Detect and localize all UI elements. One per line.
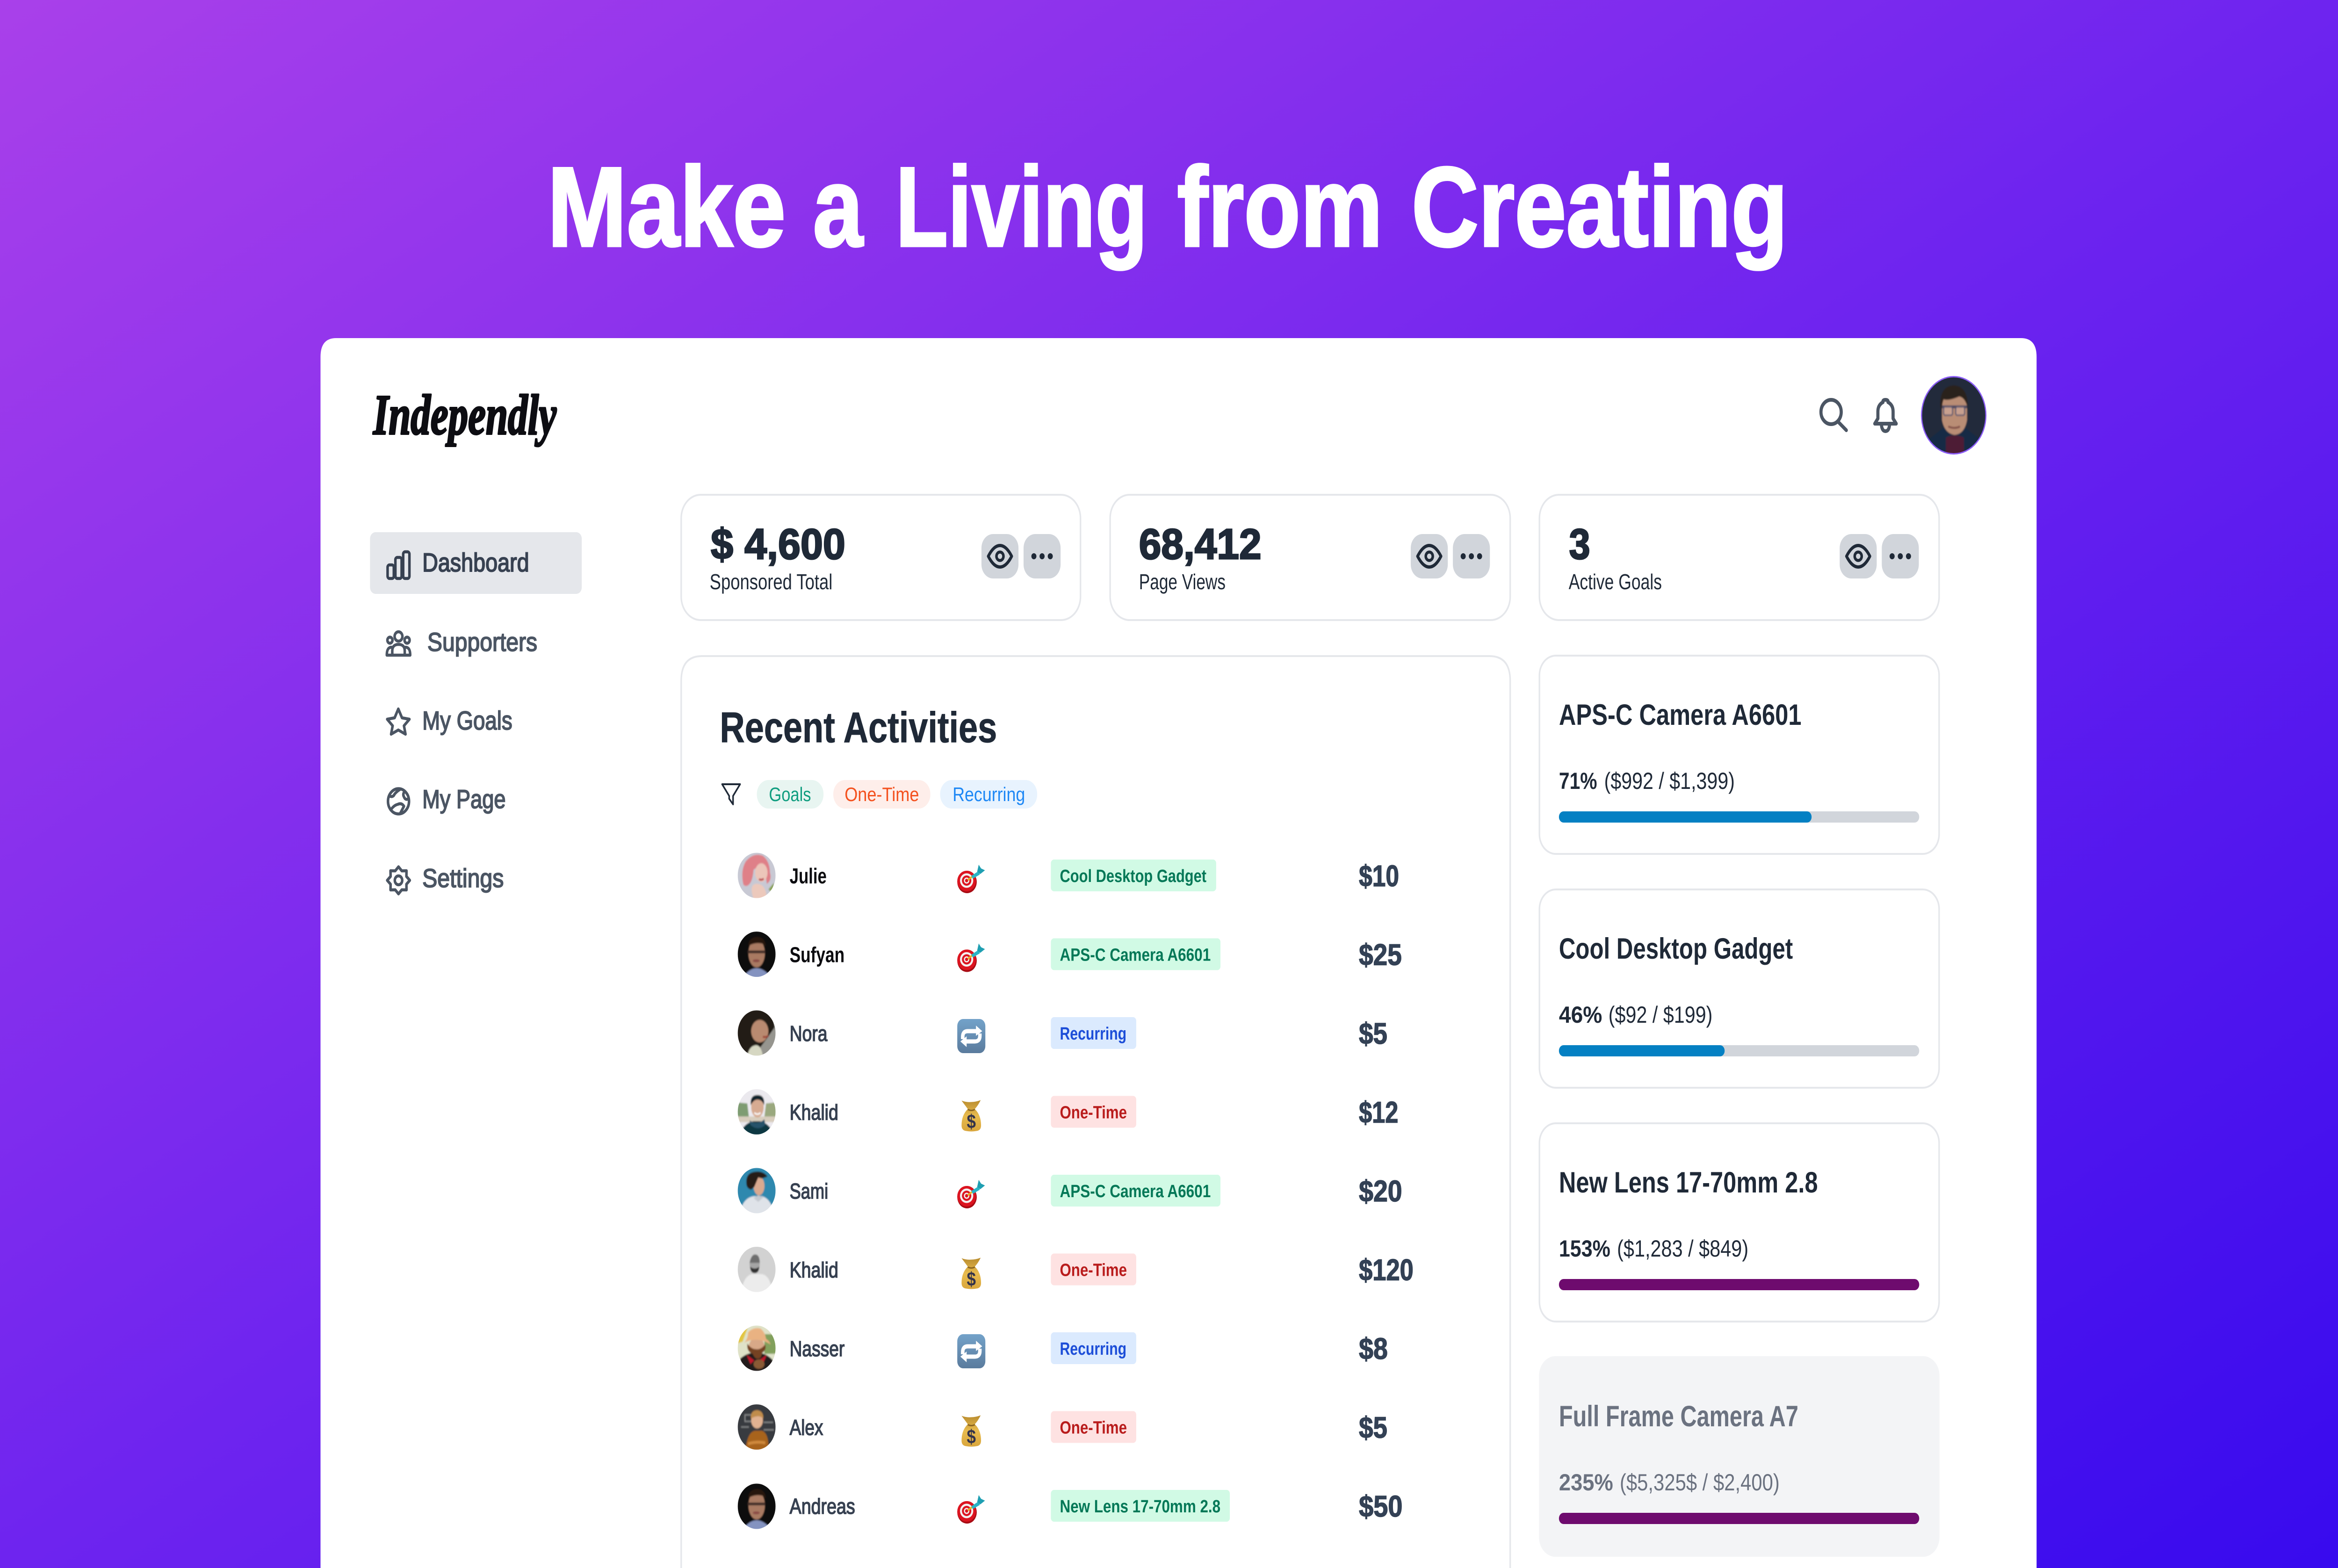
nav item: My Goals: My Goals [422,706,512,735]
logo: Independly [373,383,557,447]
filter pill: One-Time [833,780,931,809]
row: Sami [737,1167,1402,1214]
goal card: APS-C Camera A6601: 71% [1559,767,1597,794]
filter pill: Goals: Goals [769,784,811,806]
filter pill: One-Time: One-Time [844,784,919,806]
row: Nasser: Recurring [1060,1339,1126,1359]
row: Alex [737,1404,1387,1451]
title: Make [548,144,786,270]
goal card: Full Frame Camera A7: ($5,325$ / $2,400) [1620,1469,1780,1496]
goal card: Cool Desktop Gadget [1539,889,1939,1088]
row: Sufyan: Sufyan [790,943,844,967]
nav item: Supporters: Supporters [427,627,537,657]
goal card: New Lens 17-70mm 2.8: ($1,283 / $849) [1617,1235,1748,1262]
row: Khalid: One-Time [1060,1260,1127,1280]
goal card: Full Frame Camera A7: Full Frame Camera A7 [1559,1400,1798,1433]
row: Khalid [737,1089,1398,1135]
panel: recent activities [681,656,1510,1568]
row: Alex: One-Time [1060,1418,1127,1438]
nav item: Settings [387,863,504,894]
goal card: APS-C Camera A6601: APS-C Camera A6601 [1559,699,1802,731]
row: Sufyan: APS-C Camera A6601 [1060,945,1211,965]
row: Nasser [737,1325,1388,1372]
avatar: account [1921,376,1986,455]
heading: Recent Activities: Recent Activities [720,703,997,751]
row: Khalid [737,1246,1414,1293]
row: Khalid: One-Time [1060,1103,1127,1122]
row: Nora: Recurring [1060,1024,1126,1044]
icon: filter [722,784,740,804]
stat card: Active Goals [1539,495,1939,620]
row: Nora: $5 [1359,1018,1387,1050]
sidebar navigation [370,532,582,894]
goal card: Cool Desktop Gadget: 46% [1559,1001,1602,1028]
header actions [1821,373,1989,457]
row: Andreas: Andreas [790,1495,855,1518]
filter pill: Recurring [940,780,1037,809]
goal card: New Lens 17-70mm 2.8: 153% [1559,1235,1610,1262]
filter pill: Recurring: Recurring [953,784,1025,806]
nav item: Settings: Settings [422,863,504,893]
row: Julie [737,852,1399,899]
nav item: My Page: My Page [422,784,506,814]
goal card: Cool Desktop Gadget: ($92 / $199) [1609,1001,1712,1028]
nav item: My Page [388,784,506,814]
row: Khalid: $12 [1359,1096,1398,1129]
row: Julie: Julie [790,864,827,888]
row: Sufyan [737,931,1402,978]
row: Nora [737,1010,1387,1056]
row: Nasser: $8 [1359,1333,1388,1366]
row: Alex: Alex [790,1416,823,1439]
title: from [1177,144,1383,270]
row: Andreas: $50 [1359,1490,1402,1523]
stat card: Active Goals: 3 [1569,520,1590,568]
stat card: Page Views: 68,412 [1139,520,1262,568]
nav item: Dashboard [370,532,582,594]
row: Sami: Sami [790,1179,828,1203]
row: Andreas [737,1483,1402,1531]
filter pill: Goals [757,780,823,809]
row: Sami: $20 [1359,1175,1402,1208]
goal card: New Lens 17-70mm 2.8: New Lens 17-70mm 2.8 [1559,1166,1818,1199]
row: Alex: $5 [1359,1411,1387,1445]
row: Andreas: New Lens 17-70mm 2.8 [1060,1496,1220,1517]
stat card: Page Views [1110,495,1510,620]
row: Nasser: Nasser [790,1337,844,1361]
nav item: Dashboard: Dashboard [422,548,529,577]
goal card: Full Frame Camera A7: 235% [1559,1469,1613,1496]
title: Creating [1412,144,1788,270]
goal card: New Lens 17-70mm 2.8 [1539,1123,1939,1322]
title: a [813,144,864,270]
panel: dashboard window [320,338,2036,1568]
row: Nora: Nora [790,1022,828,1046]
icon: bell [1875,400,1896,431]
row: Khalid: Khalid [790,1258,838,1282]
row: Sami: APS-C Camera A6601 [1060,1181,1211,1201]
goal card: Cool Desktop Gadget: Cool Desktop Gadget [1559,932,1793,965]
icon: search [1821,400,1846,430]
stat card: Page Views: Page Views [1139,570,1226,594]
row: Khalid: $120 [1359,1254,1414,1287]
stat card: Sponsored Total [681,495,1081,620]
row: Sufyan: $25 [1359,939,1402,972]
stat card: Sponsored Total: $ 4,600 [711,520,845,568]
stat card: Active Goals: Active Goals [1569,570,1662,594]
goal card: Full Frame Camera A7 [1539,1356,1940,1557]
row: Khalid: Khalid [790,1100,838,1124]
row: Julie: $10 [1359,860,1399,893]
row: Julie: Cool Desktop Gadget [1060,866,1206,886]
stat card: Sponsored Total: Sponsored Total [710,570,832,594]
goal card: APS-C Camera A6601 [1539,656,1939,854]
title: Living [895,144,1147,270]
goal card: APS-C Camera A6601: ($992 / $1,399) [1604,767,1735,794]
